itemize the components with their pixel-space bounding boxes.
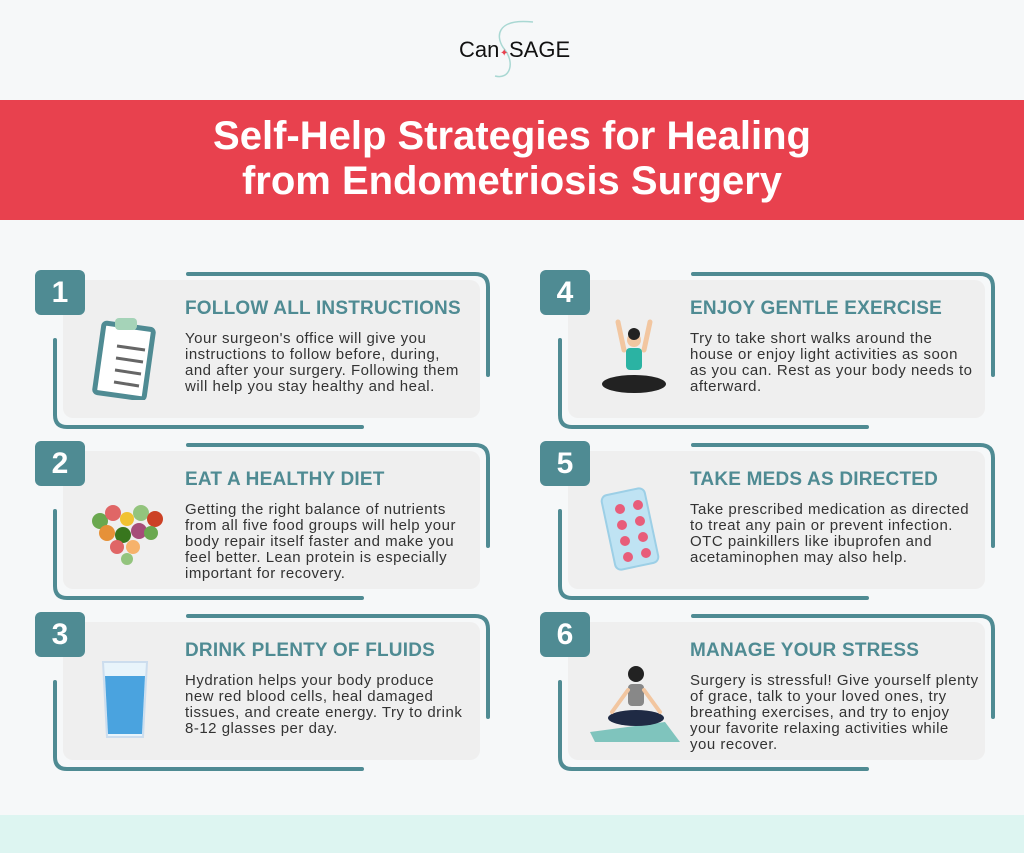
card 5: TAKE MEDS AS DIRECTED <box>690 469 938 490</box>
card 4 <box>540 270 995 429</box>
card 3: new red blood cells, heal damaged <box>185 688 433 705</box>
card 3: 8-12 glasses per day. <box>185 720 338 737</box>
card 4: house or enjoy light activities as soon <box>690 346 958 363</box>
card 2: important for recovery. <box>185 565 345 582</box>
card 5: 5 <box>557 447 573 480</box>
card 1: FOLLOW ALL INSTRUCTIONS <box>185 298 461 319</box>
card 1: 1 <box>52 276 68 309</box>
footer band <box>0 815 1024 853</box>
card 4: 4 <box>557 276 573 309</box>
card 6: 6 <box>557 618 573 651</box>
card 6 <box>540 612 995 771</box>
card 5: Take prescribed medication as directed <box>690 501 969 518</box>
icon: meditating woman on mat <box>590 666 680 742</box>
card 2: 2 <box>52 447 68 480</box>
logo: ✦ <box>500 48 508 59</box>
card 6: you recover. <box>690 736 778 753</box>
card 6: your favorite relaxing activities while <box>690 720 949 737</box>
icon: glass of water <box>102 661 148 738</box>
header banner <box>0 100 1024 220</box>
card 2: Getting the right balance of nutrients <box>185 501 446 518</box>
card 5: OTC painkillers like ibuprofen and <box>690 533 932 550</box>
card 4: as you can. Rest as your body needs to <box>690 362 972 379</box>
icon: stretching woman <box>602 320 666 393</box>
card 6: of grace, talk to your loved ones, try <box>690 688 947 705</box>
header banner: Self-Help Strategies for Healing <box>213 114 811 158</box>
card 1: and after your surgery. Following them <box>185 362 459 379</box>
card 2: body repair itself faster and make you <box>185 533 454 550</box>
logo <box>459 20 570 78</box>
card 5 <box>540 441 995 600</box>
card 4: Try to take short walks around the <box>690 330 932 347</box>
card 5: acetaminophen may also help. <box>690 549 907 566</box>
logo: Can <box>459 37 499 62</box>
card 6: breathing exercises, and try to enjoy <box>690 704 949 721</box>
card 3: 3 <box>52 618 68 651</box>
card 2 <box>35 441 490 600</box>
card 1: instructions to follow before, during, <box>185 346 440 363</box>
logo: SAGE <box>509 37 570 62</box>
card 3: tissues, and create energy. Try to drink <box>185 704 462 721</box>
card 6: MANAGE YOUR STRESS <box>690 640 919 661</box>
card 4: afterward. <box>690 378 762 395</box>
card 1: Your surgeon's office will give you <box>185 330 426 347</box>
card 3: DRINK PLENTY OF FLUIDS <box>185 640 435 661</box>
card 1: will help you stay healthy and heal. <box>185 378 435 395</box>
card 2: from all five food groups will help your <box>185 517 456 534</box>
card 5: to treat any pain or prevent infection. <box>690 517 953 534</box>
card 1 <box>35 270 490 429</box>
icon: clipboard <box>92 318 156 400</box>
card 4: ENJOY GENTLE EXERCISE <box>690 298 942 319</box>
icon: pill blister <box>600 487 660 571</box>
header banner: from Endometriosis Surgery <box>242 159 782 203</box>
icon: food heart <box>92 505 163 565</box>
card 3 <box>35 612 490 771</box>
card 3: Hydration helps your body produce <box>185 672 434 689</box>
card 6: Surgery is stressful! Give yourself plenty <box>690 672 979 689</box>
card 2: EAT A HEALTHY DIET <box>185 469 385 490</box>
card 2: feel better. Lean protein is especially <box>185 549 447 566</box>
